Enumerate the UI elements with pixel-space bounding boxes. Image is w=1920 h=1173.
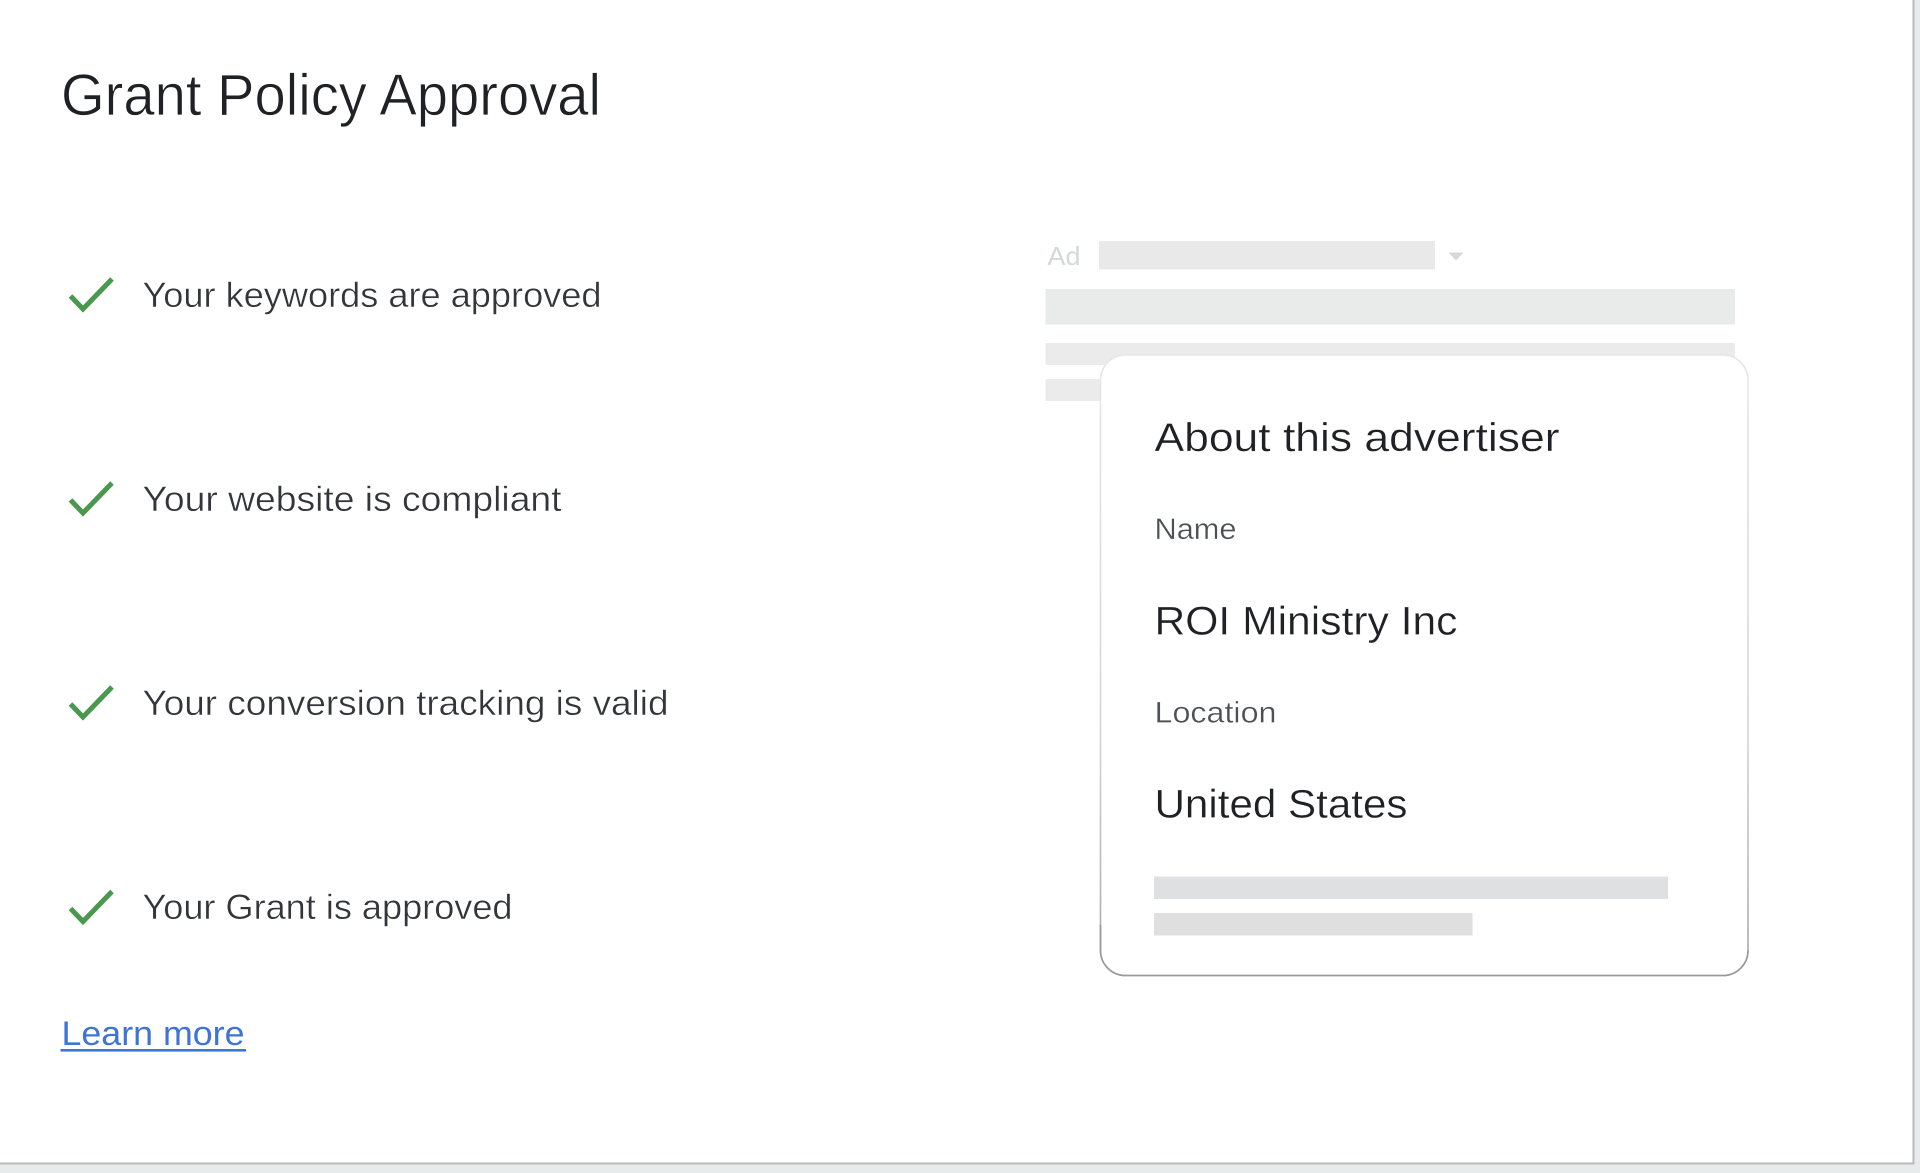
- placeholder bar: line one: [1046, 343, 1735, 365]
- icon: green check: [70, 279, 112, 309]
- location value: United States: [1154, 782, 1408, 826]
- row: grant approved: [70, 888, 512, 927]
- placeholder bar: line two: [1046, 379, 1106, 401]
- card bottom edge: [1100, 925, 1748, 976]
- card heading: About this advertiser: [1154, 416, 1560, 460]
- row text: Your conversion tracking is valid: [142, 684, 668, 723]
- row text: Your Grant is approved: [142, 888, 512, 927]
- title: Grant Policy Approval: [61, 63, 601, 128]
- placeholder bar: headline: [1046, 289, 1735, 324]
- ad placeholder behind card: [1046, 241, 1735, 401]
- checklist: [70, 276, 668, 927]
- location label: Location: [1154, 696, 1276, 730]
- placeholder bar: ad url: [1099, 241, 1435, 270]
- row text: Your keywords are approved: [142, 276, 602, 315]
- name label: Name: [1154, 513, 1236, 546]
- row: conversion tracking valid: [70, 684, 668, 723]
- row text: Your website is compliant: [142, 480, 562, 519]
- icon: green check: [70, 687, 112, 717]
- icon: green check: [70, 483, 112, 513]
- card background: [1100, 355, 1748, 976]
- learn more link: Learn more: [62, 1015, 244, 1053]
- placeholder bar: disclosure line one: [1154, 876, 1668, 899]
- placeholder bar: disclosure line two: [1154, 913, 1472, 936]
- row: website compliant: [70, 480, 562, 519]
- name value: ROI Ministry Inc: [1154, 600, 1458, 644]
- panel: about this advertiser card: [1100, 355, 1748, 976]
- icon: green check: [70, 892, 112, 922]
- icon: dropdown caret: [1448, 252, 1464, 260]
- row: keywords approved: [70, 276, 602, 315]
- ad label: Ad: [1048, 241, 1080, 271]
